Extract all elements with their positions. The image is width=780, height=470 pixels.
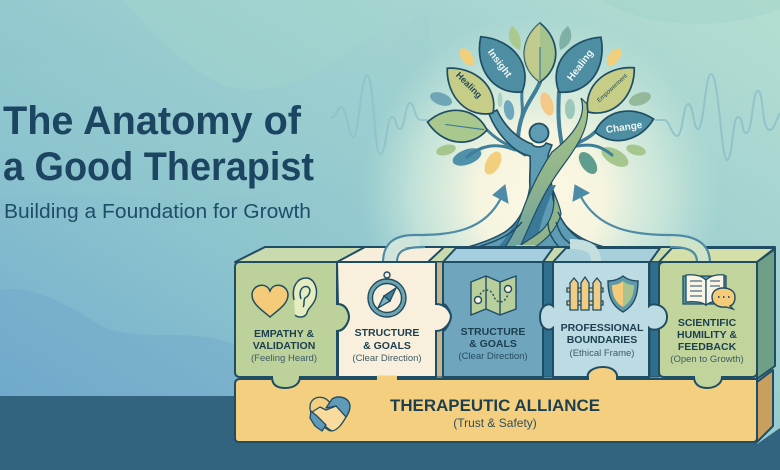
foundation sublabel: (Trust & Safety) — [453, 416, 537, 430]
humility text: HUMILITY & — [677, 329, 737, 341]
icon: shield — [608, 276, 638, 312]
block: therapeutic alliance — [235, 379, 757, 442]
foundation label: THERAPEUTIC ALLIANCE — [390, 396, 600, 415]
blue structure text — [458, 326, 528, 362]
label: change: Change — [605, 120, 643, 136]
boundaries text: PROFESSIONAL — [561, 322, 644, 334]
humility text: (Open to Growth) — [670, 354, 744, 365]
structure text — [352, 327, 422, 364]
boundaries text: BOUNDARIES — [567, 334, 637, 346]
pulse wave left — [330, 75, 428, 154]
boundaries text: (Ethical Frame) — [570, 348, 634, 359]
blue structure text: & GOALS — [469, 338, 517, 350]
label: healing left: Healing — [454, 70, 484, 100]
subtitle: Building a Foundation for Growth — [4, 201, 311, 223]
floor — [0, 396, 780, 470]
growth arrow right — [573, 185, 710, 263]
empathy text: VALIDATION — [253, 340, 315, 352]
leaf: big left — [425, 106, 489, 146]
gap pieces — [436, 262, 443, 377]
leaf: change — [592, 105, 657, 146]
foundation side — [757, 370, 773, 442]
leaf: top centre — [524, 23, 556, 82]
figure and trunk — [468, 110, 604, 247]
foundation tab into block — [588, 367, 617, 378]
tab join — [589, 376, 616, 381]
pulse wave right — [655, 74, 780, 160]
blue structure text: (Clear Direction) — [458, 351, 528, 362]
structure text: (Clear Direction) — [352, 353, 422, 364]
icon: map — [471, 276, 516, 315]
puzzle blocks — [235, 247, 775, 442]
title — [3, 99, 314, 189]
root strands — [478, 212, 594, 248]
icon: speech bubble — [712, 288, 735, 309]
label: empowerment: Empowerment — [596, 73, 629, 104]
icon: heart — [252, 285, 288, 317]
tree — [425, 23, 657, 265]
block: empathy and validation — [235, 262, 349, 388]
humility text: SCIENTIFIC — [678, 317, 737, 329]
label: healing right: Healing — [566, 48, 596, 83]
leaf: healing left — [436, 57, 504, 125]
root streams over blocks — [513, 245, 598, 265]
empathy text: EMPATHY & — [254, 328, 314, 340]
leaf: insight — [466, 26, 537, 103]
icon: open book — [683, 275, 726, 305]
empathy text: (Feeling Heard) — [251, 353, 317, 364]
growth arrow left — [383, 185, 508, 263]
label: insight: Insight — [485, 47, 514, 81]
blue structure text: STRUCTURE — [461, 326, 525, 338]
block: structure and goals blue — [443, 262, 543, 377]
humility text — [670, 317, 744, 365]
green strand lower — [516, 190, 561, 248]
top faces — [235, 247, 775, 262]
humility text: FEEDBACK — [678, 341, 737, 353]
icon: compass — [368, 272, 406, 317]
structure text: & GOALS — [363, 340, 411, 352]
structure text: STRUCTURE — [355, 327, 419, 339]
block: professional boundaries — [540, 262, 667, 381]
branches — [467, 82, 612, 157]
leaf: healing right — [544, 26, 616, 103]
icon: fence — [567, 277, 603, 310]
block: structure and goals cream — [337, 262, 451, 377]
leaf: empowerment — [577, 56, 645, 124]
icon: ear — [293, 278, 317, 317]
title: The Anatomy of — [3, 99, 302, 143]
title: a Good Therapist — [3, 145, 314, 189]
foundation tab under cream block — [377, 376, 397, 382]
block: scientific humility — [659, 262, 757, 388]
boundaries text — [561, 322, 644, 359]
block side — [757, 249, 775, 379]
green ribbon — [505, 98, 588, 247]
empathy text — [251, 328, 317, 364]
head — [530, 124, 548, 142]
icon: handshake — [310, 397, 350, 431]
small floating leaves — [428, 26, 653, 177]
arc from professional block — [570, 244, 596, 262]
dark twist — [498, 185, 556, 247]
